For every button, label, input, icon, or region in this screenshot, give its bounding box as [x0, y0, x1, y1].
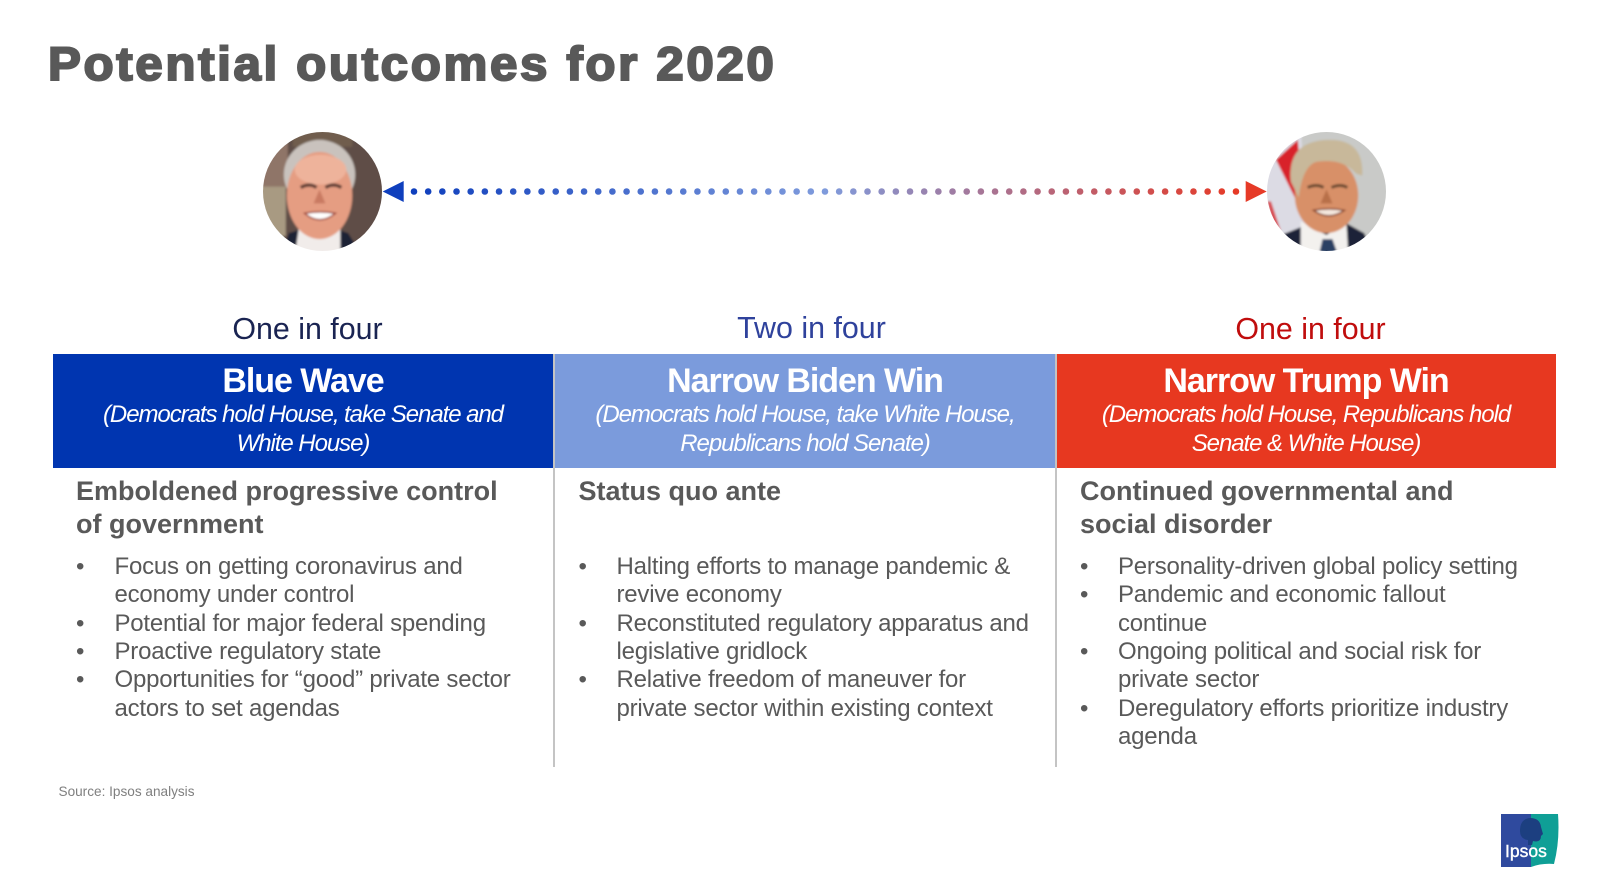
panel: Blue Wave header	[53, 354, 553, 468]
divider	[553, 354, 555, 767]
text block: Blue Wave outcome: of government	[76, 509, 264, 539]
panel: Narrow Trump Win header: (Democrats hold House, Republicans hold	[1102, 401, 1510, 428]
panel: Blue Wave header: (Democrats hold House, take Senate and	[103, 401, 503, 428]
text block: Narrow Trump outcome: Personality-driven global policy setting	[1118, 553, 1518, 580]
text block: Narrow Trump outcome: agenda	[1118, 723, 1197, 750]
text block: Blue Wave outcome: •	[76, 638, 84, 665]
icon: Biden portrait	[263, 132, 382, 251]
panel: Narrow Trump Win header: Senate & White House)	[1192, 430, 1420, 457]
label: narrow Biden probability: Two in four	[737, 310, 886, 344]
text block: Narrow Biden outcome: Status quo ante	[578, 476, 781, 506]
text block: Blue Wave outcome: Opportunities for “good” private sector	[114, 666, 511, 693]
text block: Narrow Trump outcome: Pandemic and economic fallout	[1118, 581, 1445, 608]
text block: Blue Wave outcome: economy under control	[114, 581, 354, 608]
text block: Blue Wave outcome	[76, 476, 511, 722]
panel: Blue Wave header: White House)	[237, 430, 369, 457]
text block: Narrow Trump outcome: Ongoing political and social risk for	[1118, 638, 1481, 665]
text block: Narrow Trump outcome: Deregulatory efforts prioritize industry	[1118, 694, 1508, 722]
arrow: probability spectrum between candidates	[382, 181, 1266, 202]
text block: Narrow Biden outcome: private sector within existing context	[616, 694, 993, 722]
text block: Narrow Trump outcome: •	[1080, 581, 1088, 608]
text block: Narrow Trump outcome: continue	[1118, 610, 1207, 637]
text block: Narrow Trump outcome: private sector	[1118, 666, 1259, 693]
text block: Narrow Biden outcome: •	[578, 666, 587, 693]
panel: Narrow Biden Win header	[555, 354, 1055, 468]
text block: Narrow Biden outcome: revive economy	[616, 581, 782, 608]
text block: Narrow Trump outcome	[1080, 476, 1518, 750]
text block: Narrow Biden outcome: •	[578, 610, 587, 637]
text block: Blue Wave outcome: Focus on getting coronavirus and	[114, 553, 463, 580]
text block: Narrow Biden outcome: Halting efforts to manage pandemic &	[616, 553, 1010, 580]
title: Potential outcomes for 2020	[48, 37, 776, 90]
text block: Blue Wave outcome: •	[76, 610, 84, 637]
text block: Blue Wave outcome: Emboldened progressive control	[76, 476, 498, 506]
text block: Blue Wave outcome: actors to set agendas	[114, 694, 340, 722]
icon: Trump portrait	[1267, 132, 1386, 251]
text block: Blue Wave outcome: •	[76, 666, 84, 693]
text block: Narrow Trump outcome: •	[1080, 638, 1088, 665]
text block: Narrow Trump outcome: social disorder	[1080, 509, 1272, 539]
panel: Narrow Trump Win header: Narrow Trump Win	[1163, 362, 1449, 400]
text block: Narrow Biden outcome: legislative gridlock	[616, 638, 807, 665]
text block: Blue Wave outcome: Proactive regulatory state	[114, 638, 381, 665]
text block: Narrow Biden outcome: •	[578, 553, 587, 580]
text block: Narrow Biden outcome	[578, 476, 1029, 722]
panel: Narrow Biden Win header: Republicans hold Senate)	[680, 430, 930, 457]
label: narrow Trump probability: One in four	[1235, 312, 1386, 346]
text block: Narrow Trump outcome: •	[1080, 553, 1088, 580]
panel: Narrow Trump Win header	[1056, 354, 1556, 468]
panel: Blue Wave header: Blue Wave	[222, 362, 384, 400]
text block: Narrow Trump outcome: •	[1080, 694, 1088, 722]
panel: Narrow Biden Win header: (Democrats hold House, take White House,	[595, 401, 1015, 428]
text block: Blue Wave outcome: Potential for major federal spending	[114, 610, 486, 637]
icon: Ipsos logo: Ipsos	[1505, 841, 1547, 861]
text block: Blue Wave outcome: •	[76, 553, 84, 580]
source note: Source: Ipsos analysis	[58, 784, 195, 798]
icon: Ipsos logo	[1501, 814, 1558, 867]
text block: Narrow Trump outcome: Continued governmental and	[1080, 476, 1454, 506]
label: blue wave probability: One in four	[232, 312, 383, 346]
panel: Narrow Biden Win header: Narrow Biden Win	[667, 362, 943, 400]
text block: Narrow Biden outcome: Relative freedom of maneuver for	[616, 666, 966, 693]
text block: Narrow Biden outcome: Reconstituted regulatory apparatus and	[616, 610, 1029, 637]
